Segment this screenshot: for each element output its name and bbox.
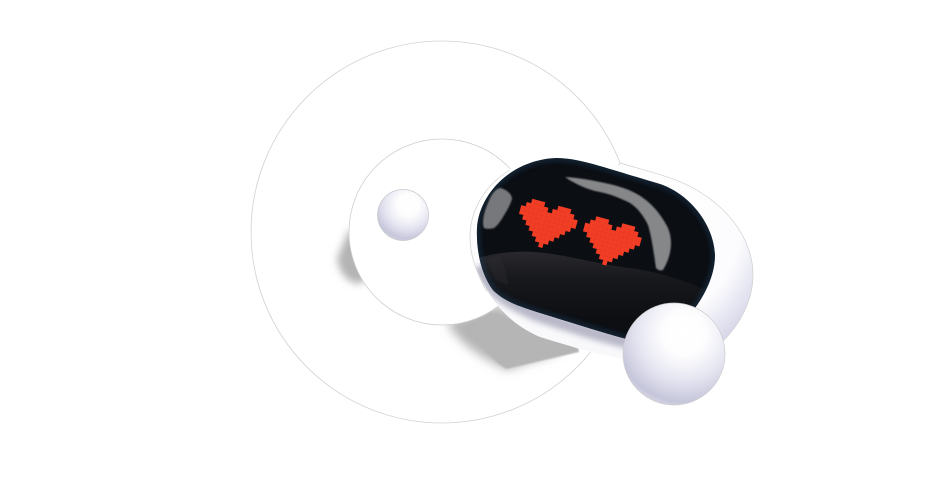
cast shadow: left of inner disc (337, 228, 375, 284)
heart eye: right (576, 214, 644, 273)
highlight: top left (483, 188, 512, 229)
shell left outline (470, 170, 510, 292)
highlight: top right (565, 177, 671, 270)
shell front (470, 157, 700, 359)
illustration: robot capsule with heart eyes (250, 40, 754, 424)
capsule black visor (477, 158, 715, 345)
cast shadow: below capsule (447, 305, 579, 370)
shell back lobe (600, 163, 753, 342)
outer circle outline (251, 41, 633, 423)
lower reflection (479, 252, 706, 338)
heart eye: left (512, 196, 580, 255)
large front sphere (623, 303, 725, 405)
navy rim glow (477, 158, 715, 340)
small sphere (378, 190, 428, 240)
left reflection patch (495, 277, 506, 283)
capsule white shell (470, 157, 753, 359)
shell contact shading (480, 266, 640, 345)
inner disc (349, 139, 535, 325)
